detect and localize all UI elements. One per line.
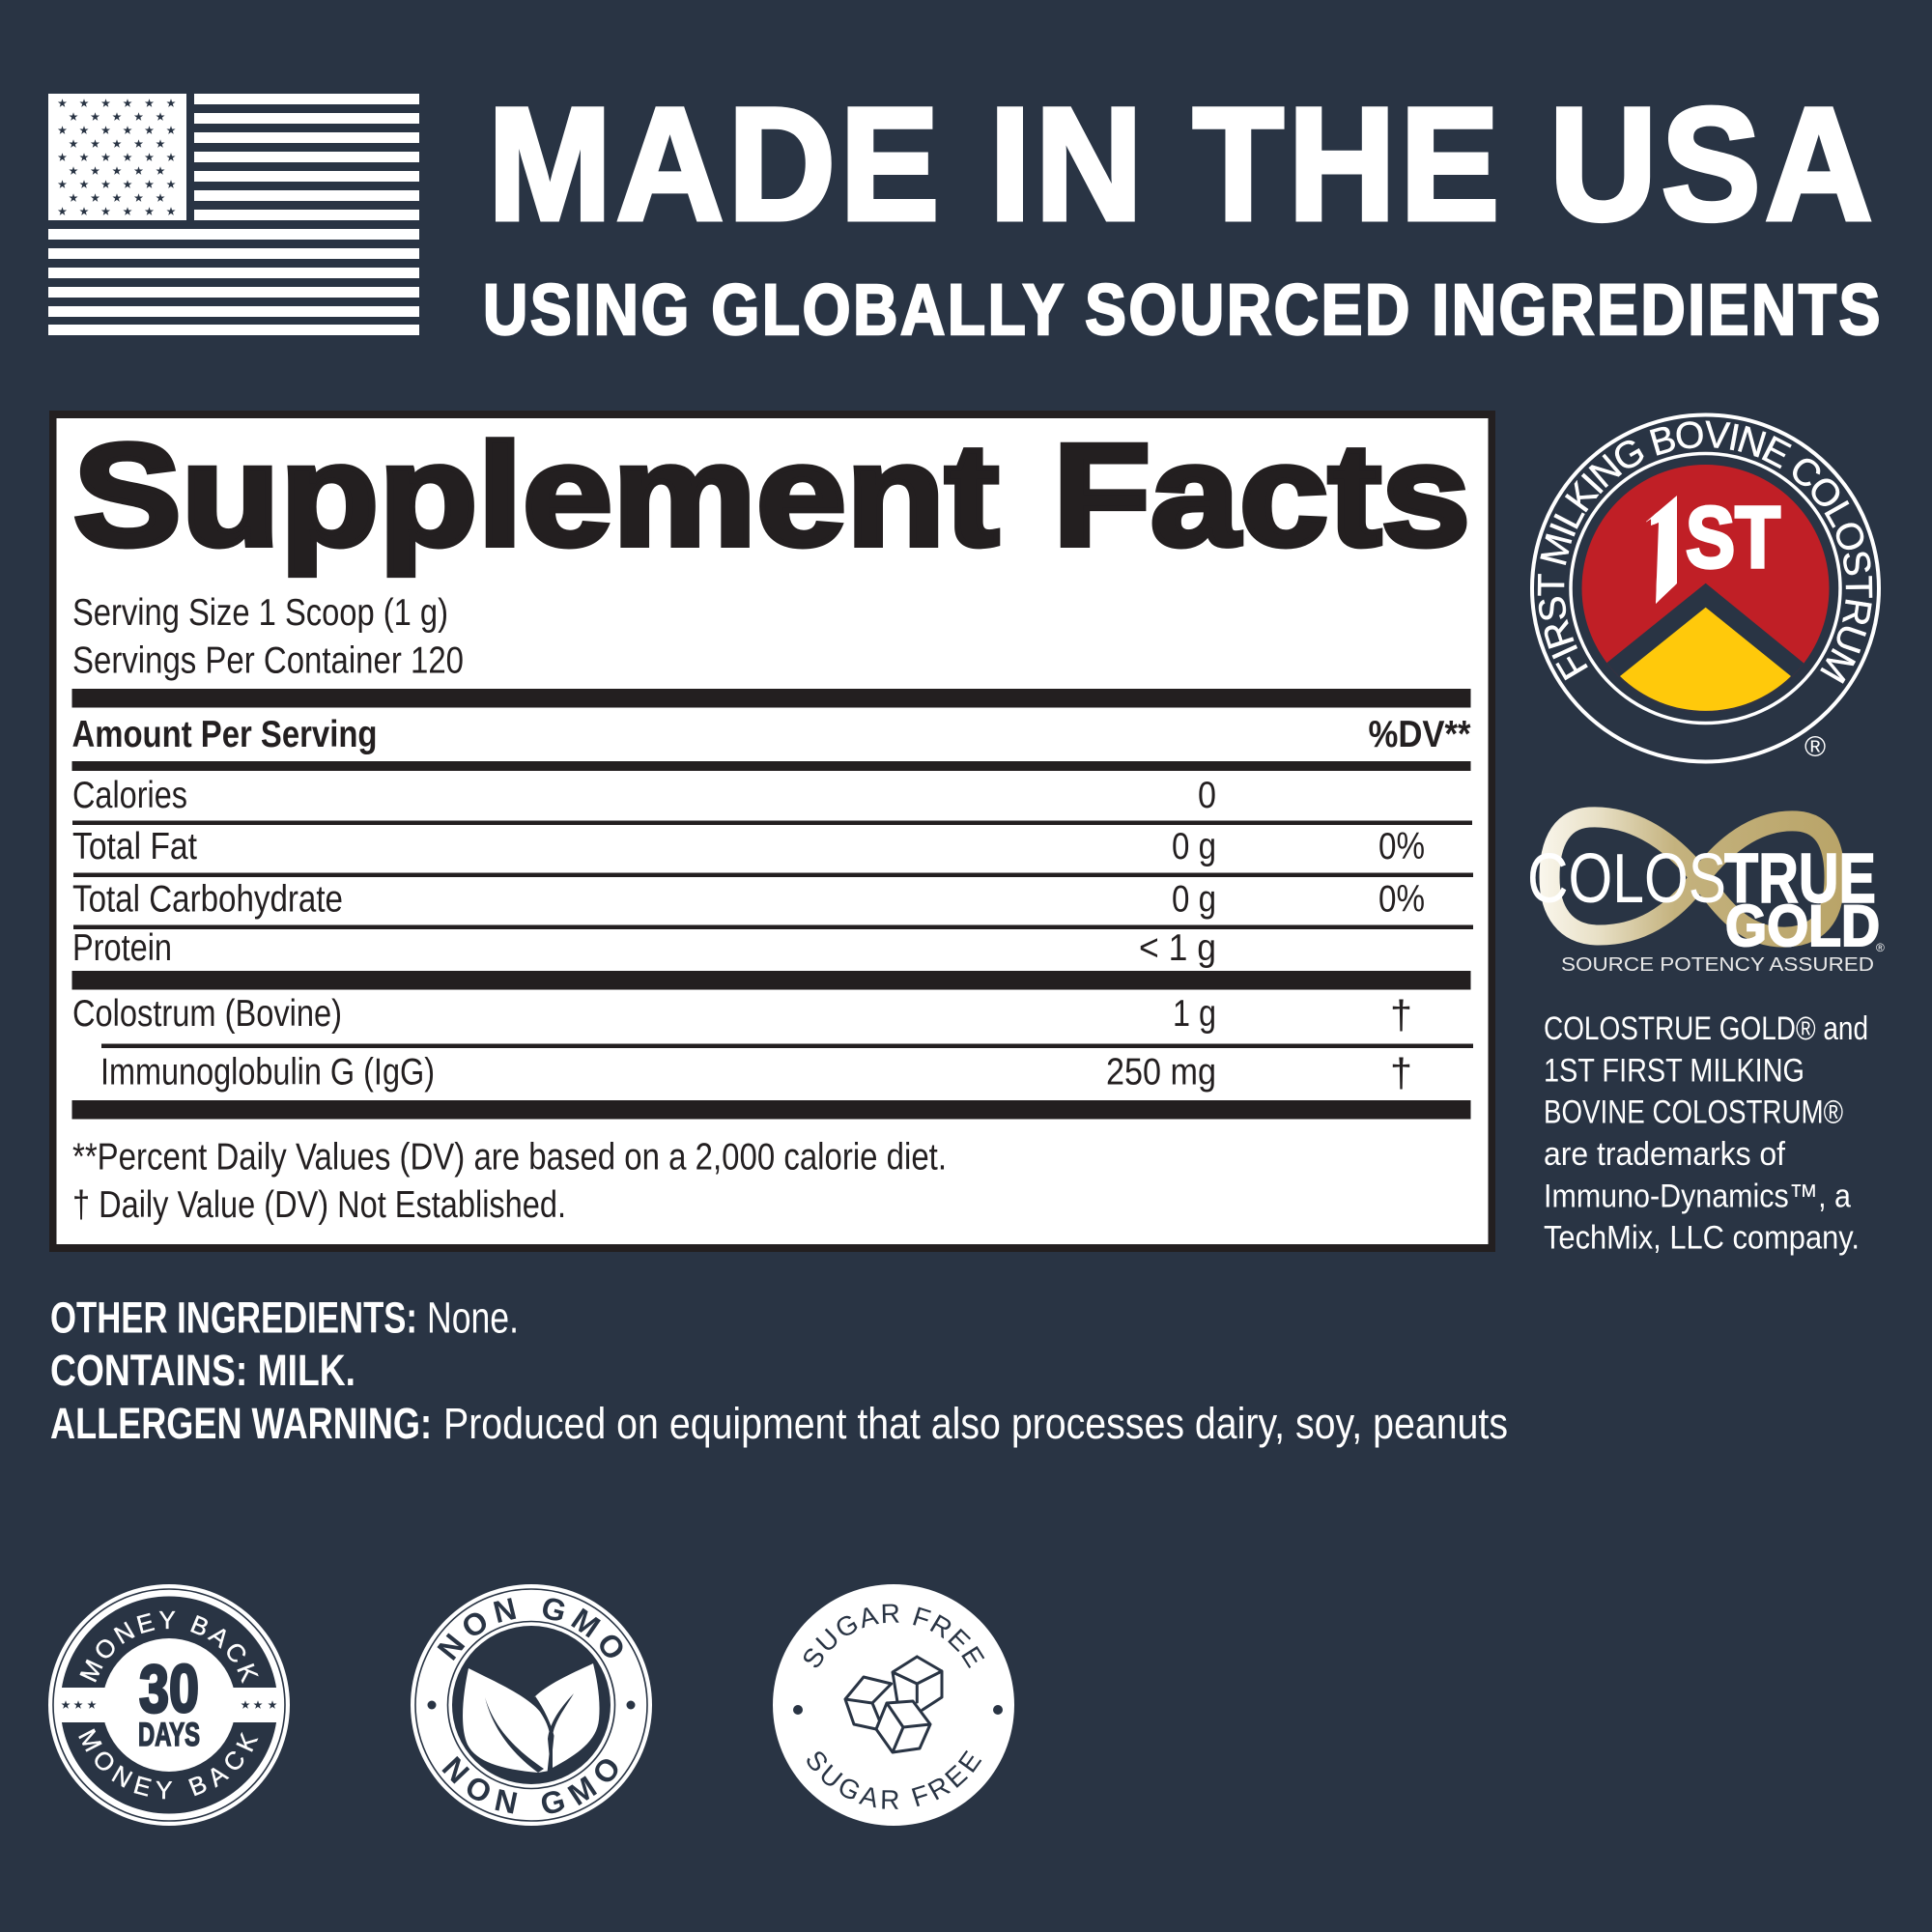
icon: colostrue gold logo: GOLD <box>1725 894 1880 958</box>
percent daily value header: %DV** <box>1368 714 1471 755</box>
icon: american flag <box>48 94 419 335</box>
row: total fat: 0 g <box>1172 826 1216 867</box>
footnote: daily values: **Percent Daily Values (DV) are based on a 2,000 calorie diet. <box>72 1136 947 1179</box>
badge: 30 days money back: 30 <box>139 1651 199 1726</box>
badge: non gmo: NON GMO <box>437 1598 622 1661</box>
row: immunoglobulin g: † <box>1390 1050 1412 1095</box>
trademark text block: TechMix, LLC company. <box>1544 1219 1860 1256</box>
trademark text block: Immuno-Dynamics™, a <box>1544 1179 1851 1215</box>
icon: first milking colostrum seal: 1 <box>1617 461 1705 638</box>
allergen warning <box>50 1399 1508 1448</box>
icon: first milking colostrum seal: ST <box>1686 490 1780 586</box>
trademark text block: 1ST FIRST MILKING <box>1544 1053 1804 1090</box>
icon: first milking colostrum seal: ® <box>1804 731 1826 763</box>
badge: sugar free: SUGAR FREE <box>804 1604 985 1668</box>
badge: non gmo: NON GMO <box>441 1756 618 1814</box>
row: total carbohydrate: 0 g <box>1172 879 1216 920</box>
heading: supplement facts: Facts <box>1053 413 1470 576</box>
row: total fat: Total Fat <box>72 826 197 867</box>
row: total fat: 0% <box>1378 826 1425 867</box>
icon: colostrue gold logo: SOURCE POTENCY ASSURED <box>1561 953 1874 976</box>
row: colostrum <box>72 992 1412 1037</box>
panel: supplement facts <box>49 411 1495 1252</box>
badge: sugar free <box>773 1584 1014 1826</box>
icon: colostrue gold logo: TRUE <box>1724 840 1876 918</box>
icon: colostrue gold logo <box>1527 817 1885 976</box>
icon: first milking colostrum seal: FIRST MILKING BOVINE COLOSTRUM <box>1538 421 1872 684</box>
contains milk: CONTAINS: MILK. <box>50 1346 355 1395</box>
badge: non gmo <box>411 1584 652 1826</box>
row: protein: Protein <box>72 927 172 969</box>
trademark text block: COLOSTRUE GOLD® and <box>1544 1010 1868 1047</box>
row: colostrum: 1 g <box>1173 993 1216 1035</box>
icon: colostrue gold logo: ® <box>1876 941 1885 954</box>
trademark text block <box>1544 1010 1868 1256</box>
badge: 30 days money back <box>48 1584 290 1826</box>
other ingredients: None. <box>427 1293 519 1343</box>
row: calories: Calories <box>72 775 187 816</box>
allergen warning: ALLERGEN WARNING: <box>50 1399 432 1448</box>
row: total carbohydrate: 0% <box>1378 879 1425 920</box>
heading: supplement facts <box>73 413 1470 576</box>
row: immunoglobulin g: 250 mg <box>1106 1051 1216 1094</box>
heading: supplement facts: Supplement <box>73 413 999 576</box>
row: total fat <box>72 826 1425 867</box>
icon: sugar cubes <box>845 1657 942 1752</box>
row: immunoglobulin g: Immunoglobulin G (IgG) <box>100 1051 435 1094</box>
row: total carbohydrate <box>72 879 1425 920</box>
badge: 30 days money back: DAYS <box>138 1717 200 1753</box>
servings per container: Servings Per Container 120 <box>72 639 464 682</box>
row: protein <box>72 927 1216 969</box>
badge: sugar free: SUGAR FREE <box>807 1750 981 1809</box>
row: colostrum: Colostrum (Bovine) <box>72 993 342 1035</box>
icon: leaves <box>463 1663 600 1773</box>
trademark text block: are trademarks of <box>1544 1136 1786 1173</box>
row: calories <box>72 775 1216 816</box>
row: protein: < 1 g <box>1139 927 1216 969</box>
row: colostrum: † <box>1390 992 1412 1037</box>
row: immunoglobulin g <box>100 1050 1412 1095</box>
serving size: Serving Size 1 Scoop (1 g) <box>72 592 448 634</box>
badge: 30 days money back: MONEY BACK <box>78 1728 259 1799</box>
badge: 30 days money back: MONEY BACK <box>79 1611 259 1684</box>
footnote: not established: † Daily Value (DV) Not Established. <box>72 1184 566 1226</box>
row: total carbohydrate: Total Carbohydrate <box>72 879 343 920</box>
trademark text block: BOVINE COLOSTRUM® <box>1544 1094 1843 1130</box>
amount per serving header: Amount Per Serving <box>71 714 377 755</box>
row: calories: 0 <box>1198 775 1216 816</box>
icon: colostrue gold logo: COLOS <box>1527 840 1726 918</box>
other ingredients: OTHER INGREDIENTS: <box>50 1293 417 1343</box>
allergen warning: Produced on equipment that also processes dairy, soy, peanuts <box>443 1399 1508 1448</box>
